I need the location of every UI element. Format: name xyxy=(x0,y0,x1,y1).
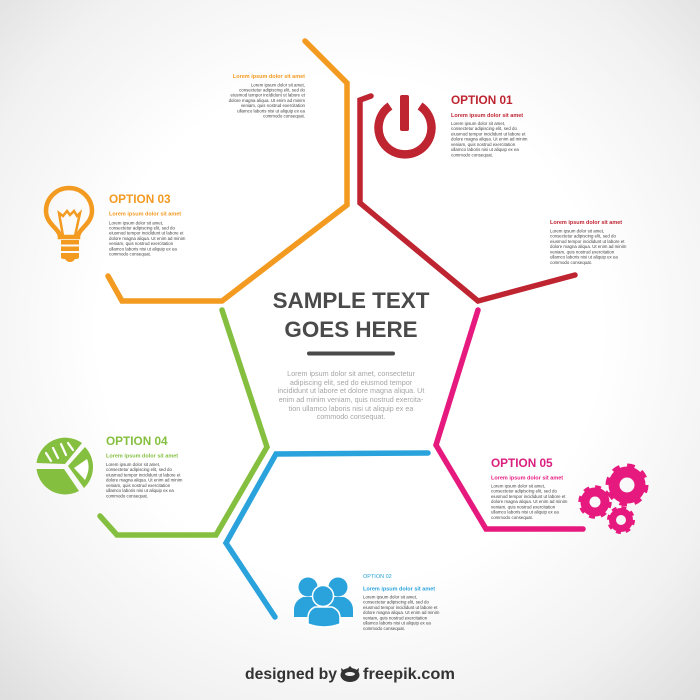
center paragraph xyxy=(278,369,424,421)
option 01 text: veniam, quis nostrud exercitation xyxy=(451,142,516,147)
magenta hexagon outline xyxy=(436,310,583,529)
option 01 text xyxy=(451,93,528,158)
option 02 text: OPTION 02 xyxy=(363,574,392,580)
option 05 text: eiusmod tempor incididunt ut labore et xyxy=(491,494,566,499)
unnamed red text block: eiusmod tempor incididunt ut labore et xyxy=(550,239,625,244)
option 04 text: OPTION 04 xyxy=(106,434,168,448)
option 01 text: OPTION 01 xyxy=(451,93,513,107)
red hexagon outline xyxy=(360,96,575,301)
unnamed red text block: veniam, quis nostrud exercitation xyxy=(550,250,615,254)
option 03 text: OPTION 03 xyxy=(109,192,171,206)
center paragraph: tion ullamco laboris nisi ut aliquip ex ea xyxy=(289,404,413,413)
footer credit: freepik.com xyxy=(363,666,455,683)
unnamed red text block: ullamco laboris nisi ut aliquip ex ea xyxy=(550,254,618,260)
center paragraph: incididunt ut labore et dolore magna aliqua. Ut xyxy=(278,386,424,395)
unnamed orange text block: eiusmod tempor incididunt ut labore et xyxy=(231,92,306,98)
option 04 text xyxy=(106,434,183,498)
green hexagon outline xyxy=(100,310,267,535)
footer credit: designed by xyxy=(245,666,337,683)
unnamed orange text block: Lorem ipsum dolor sit amet, xyxy=(251,82,305,88)
unnamed orange text block: ullamco laboris nisi ut aliquip ex ea xyxy=(237,108,306,114)
option 02 text: consectetur adipiscing elit, sed do xyxy=(363,600,429,604)
option 05 text: ullamco laboris nisi ut aliquip ex ea xyxy=(491,510,559,514)
option 03 text: ullamco laboris nisi ut aliquip ex ea xyxy=(109,246,177,252)
option 03 text: Lorem ipsum dolor sit amet, xyxy=(109,220,163,226)
unnamed orange text block: Lorem ipsum dolor sit amet xyxy=(233,74,305,80)
icon: power button xyxy=(378,95,432,154)
option 05 text: OPTION 05 xyxy=(491,456,553,470)
icon: pie chart xyxy=(36,438,93,494)
icon: freepik mascot xyxy=(340,666,360,682)
option 01 text: commodo consequat. xyxy=(451,152,493,158)
option 05 text: commodo consequat. xyxy=(491,515,533,520)
center title xyxy=(273,288,430,342)
center paragraph: enim ad minim veniam, quis nostrud exercita- xyxy=(279,395,424,404)
option 02 text: Lorem ipsum dolor sit amet xyxy=(363,586,435,592)
unnamed red text block xyxy=(550,220,627,265)
unnamed red text block: dolore magna aliqua. Ut enim ad minim xyxy=(550,244,627,249)
unnamed red text block: consectetur adipiscing elit, sed do xyxy=(550,234,616,238)
option 02 text xyxy=(363,574,440,631)
unnamed red text block: Lorem ipsum dolor sit amet xyxy=(550,220,622,226)
option 04 text: dolore magna aliqua. Ut enim ad minim xyxy=(106,478,183,482)
unnamed orange text block: consectetur adipiscing elit, sed do xyxy=(239,88,306,92)
center paragraph: adipiscing elit, sed do eiusmod tempor xyxy=(290,378,413,387)
option 05 text: dolore magna aliqua. Ut enim ad minim xyxy=(491,499,568,504)
unnamed red text block: commodo consequat. xyxy=(550,260,592,265)
blue hexagon outline xyxy=(226,453,428,617)
option 02 text: eiusmod tempor incididunt ut labore et xyxy=(363,605,438,610)
option 03 text xyxy=(109,192,186,256)
option 03 text: eiusmod tempor incididunt ut labore et xyxy=(109,230,184,236)
center paragraph: Lorem ipsum dolor sit amet, consectetur xyxy=(287,369,416,378)
option 04 text: consectetur adipiscing elit, sed do xyxy=(106,467,172,472)
option 02 text: commodo consequat. xyxy=(363,626,405,631)
unnamed orange text block: dolore magna aliqua. Ut enim ad minim xyxy=(229,98,305,103)
icon: people group xyxy=(294,578,353,627)
option 03 text: Lorem ipsum dolor sit amet xyxy=(109,212,181,218)
option 04 text: commodo consequat. xyxy=(106,494,148,498)
unnamed red text block: Lorem ipsum dolor sit amet, xyxy=(550,228,604,234)
option 01 text: Lorem ipsum dolor sit amet, xyxy=(451,121,505,126)
option 01 text: dolore magna aliqua. Ut enim ad minim xyxy=(451,136,528,142)
footer credit xyxy=(245,666,455,683)
option 04 text: ullamco laboris nisi ut aliquip ex ea xyxy=(106,488,174,493)
option 04 text: veniam, quis nostrud exercitation xyxy=(106,483,171,488)
option 03 text: dolore magna aliqua. Ut enim ad minim xyxy=(109,236,186,241)
option 02 text: dolore magna aliqua. Ut enim ad minim xyxy=(363,610,440,615)
center title: GOES HERE xyxy=(284,317,418,342)
icon: gears xyxy=(580,466,646,532)
icon: light bulb xyxy=(46,188,92,262)
center divider bar xyxy=(307,352,395,356)
option 05 text: Lorem ipsum dolor sit amet, xyxy=(491,484,545,488)
center title: SAMPLE TEXT xyxy=(273,288,430,313)
option 02 text: veniam, quis nostrud exercitation xyxy=(363,616,428,620)
option 03 text: veniam, quis nostrud exercitation xyxy=(109,241,174,246)
option 05 text: veniam, quis nostrud exercitation xyxy=(491,504,556,510)
option 05 text: Lorem ipsum dolor sit amet xyxy=(491,476,563,482)
unnamed orange text block: veniam, quis nostrud exercitation xyxy=(241,103,306,108)
unnamed orange text block: commodo consequat. xyxy=(263,114,305,118)
option 03 text: consectetur adipiscing elit, sed do xyxy=(109,226,175,230)
option 05 text xyxy=(491,456,568,520)
option 01 text: eiusmod tempor incididunt ut labore et xyxy=(451,132,526,136)
option 03 text: commodo consequat. xyxy=(109,252,151,256)
option 02 text: ullamco laboris nisi ut aliquip ex ea xyxy=(363,620,431,626)
option 02 text: Lorem ipsum dolor sit amet, xyxy=(363,594,417,600)
unnamed orange text block xyxy=(229,74,306,118)
option 04 text: Lorem ipsum dolor sit amet, xyxy=(106,462,160,467)
option 01 text: Lorem ipsum dolor sit amet xyxy=(451,113,523,119)
option 01 text: consectetur adipiscing elit, sed do xyxy=(451,126,517,131)
center paragraph: commodo consequat. xyxy=(317,412,385,421)
option 04 text: Lorem ipsum dolor sit amet xyxy=(106,454,178,460)
option 01 text: ullamco laboris nisi ut aliquip ex ea xyxy=(451,147,519,152)
option 05 text: consectetur adipiscing elit, sed do xyxy=(491,488,557,494)
option 04 text: eiusmod tempor incididunt ut labore et xyxy=(106,472,181,478)
orange hexagon outline xyxy=(108,41,347,301)
